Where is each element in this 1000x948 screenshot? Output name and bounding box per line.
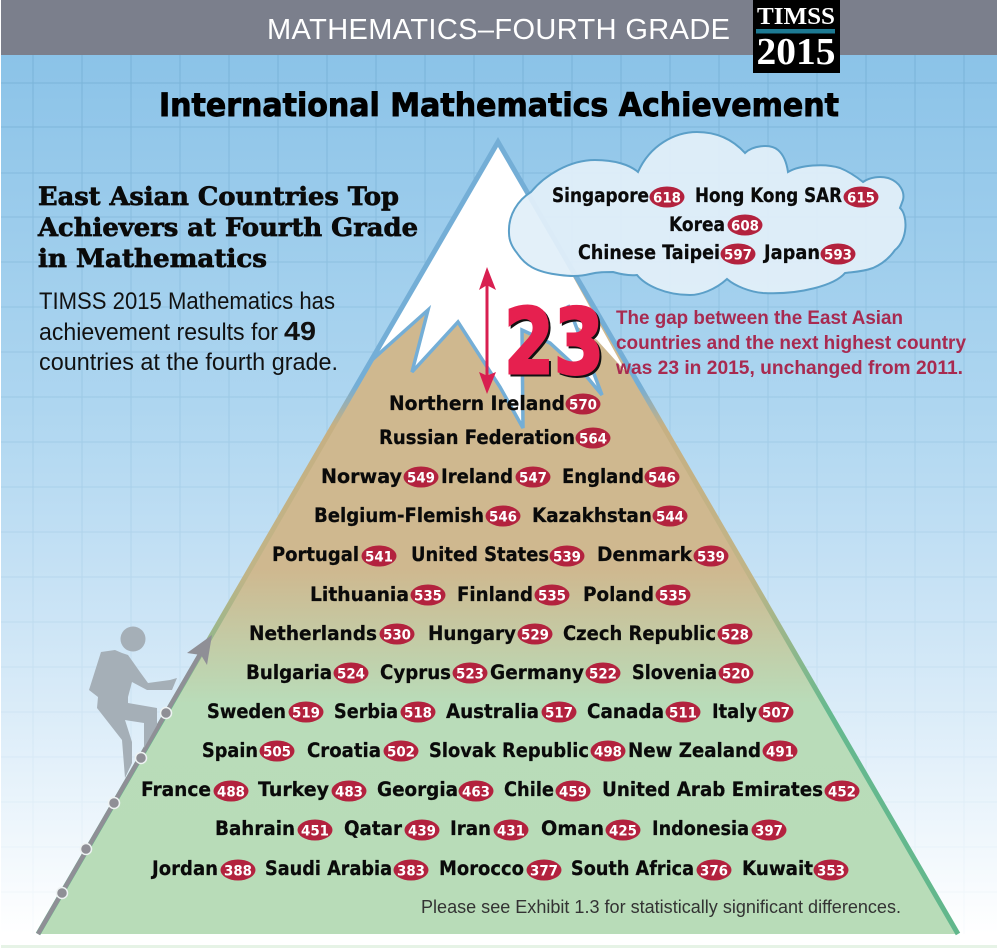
row: 519-507: 517 xyxy=(545,706,573,722)
row: 570: Northern Ireland xyxy=(389,392,565,415)
row: 488-452: 483 xyxy=(335,784,363,800)
cloud text: top five countries: Japan xyxy=(762,241,820,264)
row: 541-539: Denmark xyxy=(597,543,693,566)
left body text: 49 xyxy=(284,316,316,346)
cloud text: top five countries: Hong Kong SAR xyxy=(695,184,842,207)
row: 388-353: 353 xyxy=(817,864,845,880)
row: 535: 535 xyxy=(414,588,442,604)
row: 541-539 xyxy=(272,543,728,566)
row: 564: 564 xyxy=(579,432,607,448)
row: 488-452 xyxy=(141,778,860,802)
cloud text: top five countries xyxy=(552,184,878,264)
row: 505-491: 498 xyxy=(594,744,622,760)
row: 388-353: 388 xyxy=(224,864,252,880)
row: 546-544: 546 xyxy=(489,510,517,526)
row: 451-397: Oman xyxy=(541,817,604,840)
header bar: MATHEMATICS–FOURTH GRADE xyxy=(267,14,730,46)
row: 564: Russian Federation xyxy=(379,426,575,449)
left heading: Achievers at Fourth Grade xyxy=(37,213,418,242)
gap explanation text xyxy=(615,307,966,379)
row: 519-507: 519 xyxy=(292,706,320,722)
row: 549-546: 547 xyxy=(519,470,547,486)
left heading: East Asian Countries Top xyxy=(38,182,399,211)
left body text xyxy=(39,288,338,376)
TIMSS 2015 logo: 2015 xyxy=(756,31,836,73)
row: 530-528: Netherlands xyxy=(249,622,377,645)
row: 524-520: 520 xyxy=(722,666,750,682)
row: 388-353: 383 xyxy=(397,864,425,880)
row: 535: 535 xyxy=(659,588,687,604)
row: 546-544: Belgium-Flemish xyxy=(314,504,484,527)
row: 519-507: Italy xyxy=(712,700,757,723)
climbing rope with arrow xyxy=(38,635,212,934)
row: 549-546 xyxy=(321,465,680,488)
row: 451-397: 451 xyxy=(301,824,329,840)
row: 388-353: Kuwait xyxy=(742,857,813,880)
gap explanation text: The gap between the East Asian xyxy=(616,307,903,329)
row: 388-353: 376 xyxy=(700,864,728,880)
row: 541-539: 539 xyxy=(553,550,581,566)
row: 524-520 xyxy=(246,661,754,684)
cloud text: top five countries: 618 xyxy=(653,190,681,206)
row: 524-520: 522 xyxy=(589,666,617,682)
mountain pyramid xyxy=(38,140,958,934)
gap explanation text: countries and the next highest country xyxy=(616,332,966,354)
TIMSS 2015 logo xyxy=(753,0,840,73)
row: 541-539: 539 xyxy=(697,550,725,566)
row: 524-520: Germany xyxy=(490,661,584,684)
row: 541-539: United States xyxy=(411,543,549,566)
row: 505-491: 502 xyxy=(387,744,415,760)
row: 505-491: Slovak Republic xyxy=(429,739,589,762)
cloud xyxy=(509,132,905,295)
row: 451-397: 431 xyxy=(497,824,525,840)
row: 524-520: Cyprus xyxy=(380,661,451,684)
cloud text: top five countries: 608 xyxy=(731,218,759,234)
row: 549-546: Norway xyxy=(321,465,402,488)
row: 505-491: Croatia xyxy=(307,739,381,762)
row: 549-546: Ireland xyxy=(441,465,513,488)
cloud text: top five countries: Chinese Taipei xyxy=(578,241,720,264)
left heading: in Mathematics xyxy=(38,244,267,273)
row: 451-397: 439 xyxy=(408,824,436,840)
row: 546-544: 544 xyxy=(656,510,684,526)
row: 488-452: Chile xyxy=(504,778,554,801)
row: 388-353: Jordan xyxy=(150,857,218,880)
row: 530-528 xyxy=(249,622,752,645)
row: 524-520: Slovenia xyxy=(632,661,717,684)
row: 388-353 xyxy=(150,857,848,880)
row: 451-397: 425 xyxy=(609,824,637,840)
row: 524-520: 523 xyxy=(456,666,484,682)
row: 570: 570 xyxy=(569,398,597,414)
row: 530-528: 529 xyxy=(521,628,549,644)
row: 530-528: Hungary xyxy=(428,622,516,645)
cloud text: top five countries: 593 xyxy=(824,248,852,264)
gap explanation text: was 23 in 2015, unchanged from 2011. xyxy=(615,357,963,379)
cloud text: top five countries: 615 xyxy=(847,190,875,206)
row: 549-546: England xyxy=(562,465,644,488)
row: 535: Lithuania xyxy=(310,583,409,606)
row: 488-452: Turkey xyxy=(258,778,329,801)
row: 451-397 xyxy=(215,817,786,840)
row: 488-452: France xyxy=(141,778,211,801)
row: 451-397: Bahrain xyxy=(215,817,295,840)
row: 519-507: Serbia xyxy=(334,700,398,723)
row: 549-546: 546 xyxy=(648,470,676,486)
row: 524-520: 524 xyxy=(337,666,365,682)
row: 451-397: Iran xyxy=(450,817,491,840)
row: 519-507: Canada xyxy=(587,700,664,723)
row: 451-397: 397 xyxy=(755,824,783,840)
row: 535: Poland xyxy=(583,583,654,606)
cloud text: top five countries: Korea xyxy=(669,213,725,236)
row: 488-452: United Arab Emirates xyxy=(602,778,823,801)
row: 549-546: 549 xyxy=(407,470,435,486)
row: 388-353: Saudi Arabia xyxy=(265,857,392,880)
row: 388-353: South Africa xyxy=(571,857,694,880)
cloud text: top five countries: 597 xyxy=(724,248,752,264)
row: 505-491 xyxy=(202,739,798,762)
cloud text: top five countries: Singapore xyxy=(552,184,649,207)
row: 530-528: 530 xyxy=(383,628,411,644)
row: 388-353: 377 xyxy=(530,864,558,880)
row: 546-544 xyxy=(314,504,688,527)
row: 488-452: 452 xyxy=(828,784,856,800)
row: 505-491: New Zealand xyxy=(628,739,761,762)
row: 541-539: Portugal xyxy=(272,543,359,566)
row: 451-397: Indonesia xyxy=(652,817,749,840)
row: 488-452: 488 xyxy=(217,784,245,800)
row: 388-353: Morocco xyxy=(439,857,524,880)
row: 505-491: 491 xyxy=(766,744,794,760)
left heading xyxy=(37,182,418,273)
TIMSS 2015 logo: TIMSS xyxy=(757,4,835,30)
row: 530-528: 528 xyxy=(721,628,749,644)
row: 541-539: 541 xyxy=(365,550,393,566)
row: 519-507: 507 xyxy=(762,706,790,722)
row: 535: 535 xyxy=(538,588,566,604)
row: 488-452: Georgia xyxy=(377,778,458,801)
header bar xyxy=(1,0,997,55)
title: International Mathematics Achievement xyxy=(159,86,839,124)
row: 519-507: Australia xyxy=(446,700,539,723)
row: 530-528: Czech Republic xyxy=(563,622,716,645)
row: 519-507: 518 xyxy=(404,706,432,722)
row: 451-397: Qatar xyxy=(344,817,402,840)
left body text: countries at the fourth grade. xyxy=(39,349,338,376)
row: 505-491: 505 xyxy=(263,744,291,760)
left body text: achievement results for xyxy=(39,319,278,346)
row: 535 xyxy=(310,583,690,606)
row: 519-507: 511 xyxy=(669,706,697,722)
snow cap xyxy=(372,142,626,428)
left body text: TIMSS 2015 Mathematics has xyxy=(39,288,335,315)
row: 488-452: 463 xyxy=(462,784,490,800)
row: 546-544: Kazakhstan xyxy=(532,504,652,527)
row: 505-491: Spain xyxy=(202,739,258,762)
row: 519-507: Sweden xyxy=(207,700,286,723)
gap number 23: 23 xyxy=(506,292,606,397)
icon: climber silhouette xyxy=(89,626,177,778)
row: 519-507 xyxy=(207,700,794,723)
gap number 23: 23 xyxy=(504,290,604,395)
row: 488-452: 459 xyxy=(559,784,587,800)
country scores list xyxy=(141,392,860,880)
row: 524-520: Bulgaria xyxy=(246,661,332,684)
double arrow: gap xyxy=(479,267,496,394)
row: 535: Finland xyxy=(457,583,533,606)
footnote: Please see Exhibit 1.3 for statistically significant differences. xyxy=(421,897,901,917)
